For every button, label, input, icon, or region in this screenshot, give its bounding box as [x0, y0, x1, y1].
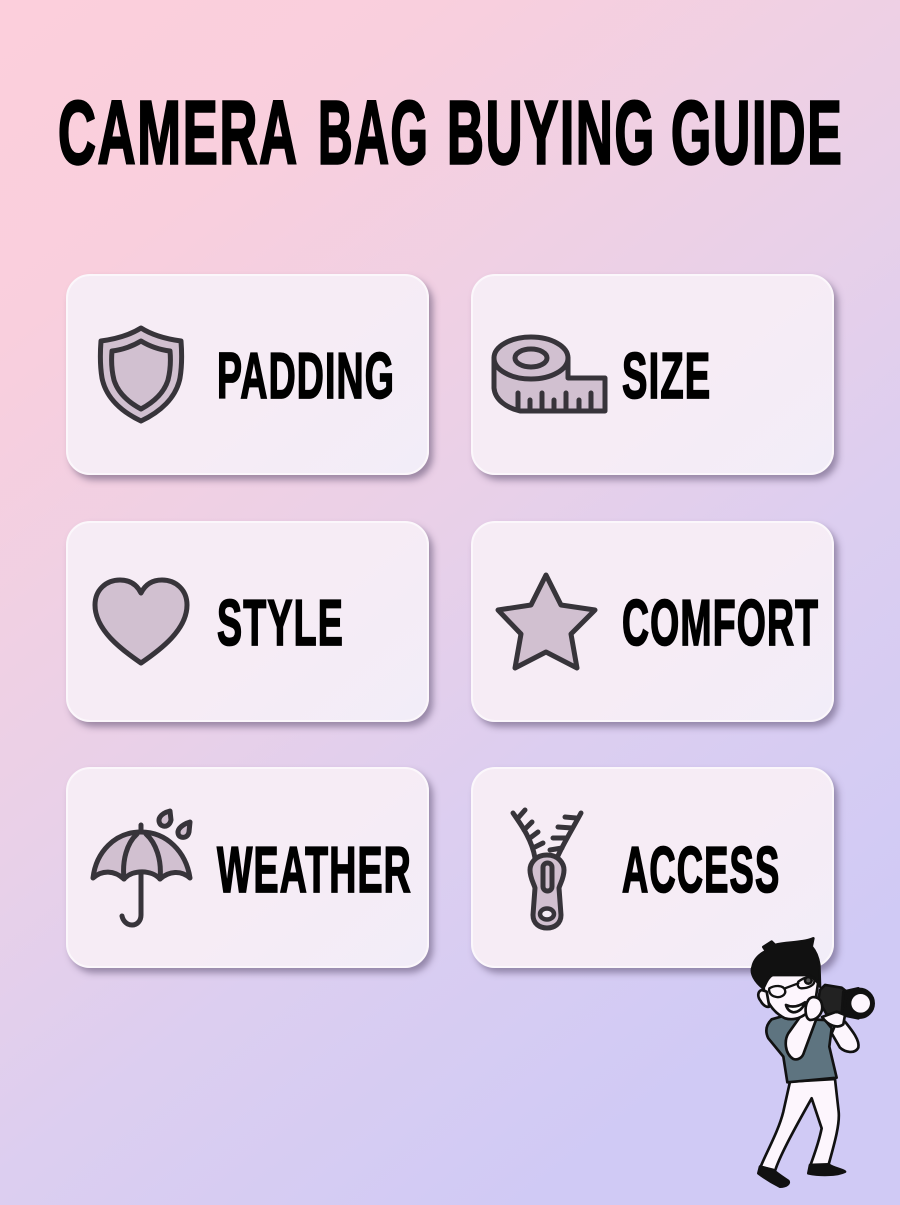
panel: size card	[471, 274, 834, 475]
hand under lens	[822, 1012, 845, 1026]
panel: padding card	[66, 274, 429, 475]
heading: access: ACCESS	[622, 835, 780, 907]
lens glass	[851, 994, 870, 1013]
far arm	[832, 1022, 859, 1052]
shoes	[758, 1164, 845, 1187]
title: GUIDE	[671, 83, 843, 183]
glasses	[769, 977, 814, 997]
head	[764, 975, 819, 1019]
icon: measuring tape	[494, 337, 605, 411]
icon: zipper	[513, 810, 581, 928]
icon: heart	[95, 580, 187, 663]
icon: star	[498, 575, 595, 668]
hand on grip	[806, 997, 822, 1020]
ear	[758, 990, 769, 1007]
title: CAMERA	[58, 83, 299, 183]
title	[58, 83, 843, 183]
mouth	[786, 1002, 805, 1012]
icon: umbrella with rain drops	[93, 811, 190, 925]
camera body	[818, 985, 847, 1015]
panel: style card	[66, 521, 429, 722]
panel: weather card	[66, 767, 429, 968]
eye	[805, 977, 812, 984]
title: BAG	[318, 83, 429, 183]
heading: size: SIZE	[622, 341, 711, 413]
illustration: photographer with camera	[752, 938, 874, 1187]
heading: padding: PADDING	[217, 341, 395, 413]
icon: shield	[100, 328, 182, 421]
title: BUYING	[447, 83, 656, 183]
lens front	[845, 989, 874, 1018]
camera lens	[842, 988, 858, 1018]
panel: comfort card	[471, 521, 834, 722]
legs and trousers	[761, 1079, 839, 1171]
heading: style: STYLE	[217, 588, 344, 660]
hair	[752, 938, 820, 988]
heading: comfort: COMFORT	[622, 588, 819, 660]
near arm	[786, 1007, 816, 1059]
heading: weather: WEATHER	[217, 835, 412, 907]
panel: access card	[471, 767, 834, 968]
shirt	[766, 1015, 837, 1082]
